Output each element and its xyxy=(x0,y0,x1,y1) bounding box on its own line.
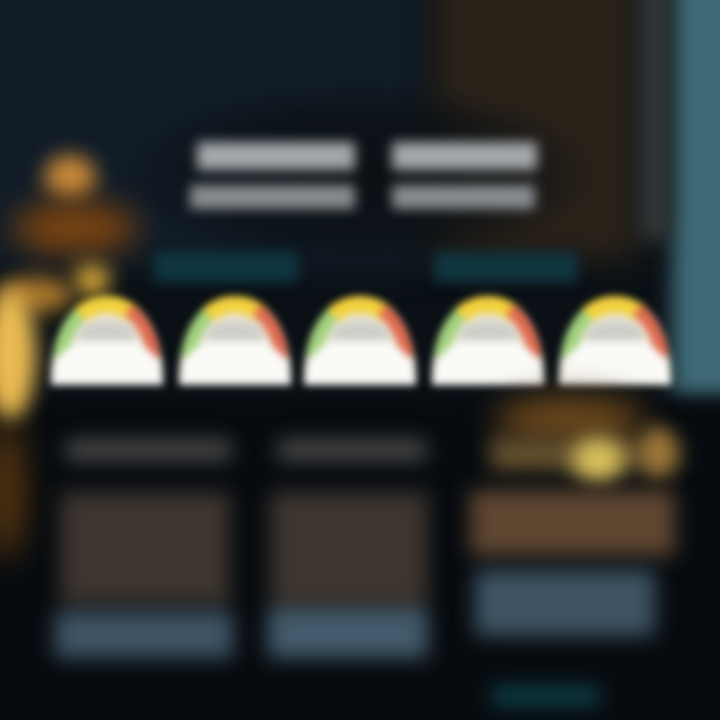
panel: column 3 xyxy=(470,396,680,636)
title xyxy=(190,142,537,209)
left lamp glow xyxy=(0,155,137,560)
gauge 3 xyxy=(304,296,416,385)
panel: column 1 xyxy=(55,440,233,658)
gauge 1 xyxy=(51,296,163,385)
gauge 5 xyxy=(559,296,671,385)
gauge 4 xyxy=(432,296,544,385)
panel: column 2 xyxy=(268,440,428,658)
gauge 2 xyxy=(179,296,291,385)
teal tag right xyxy=(434,252,578,282)
bottom teal accent xyxy=(492,686,600,706)
teal tag left xyxy=(154,252,298,282)
